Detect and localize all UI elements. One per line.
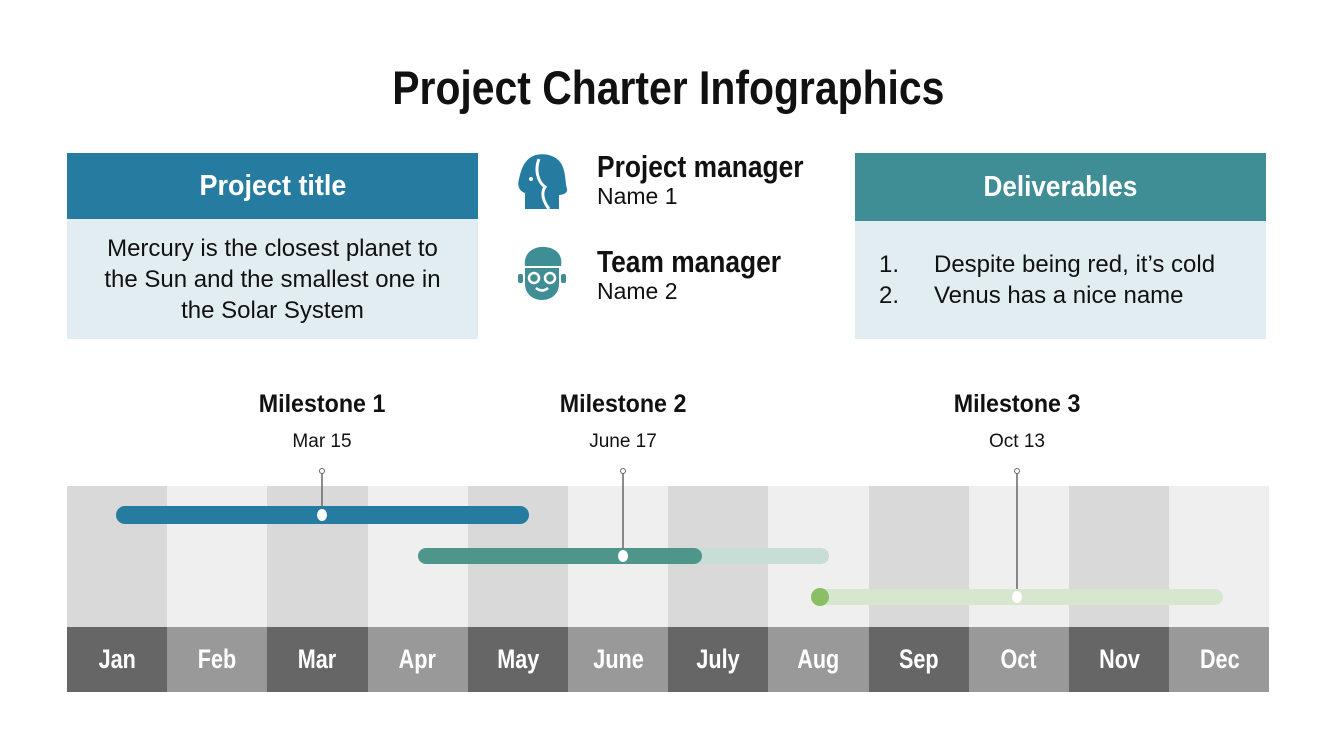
list: deliverables: Venus has a nice name bbox=[934, 282, 1184, 309]
heading: project title: Project title bbox=[199, 170, 346, 202]
gantt chart: Mar bbox=[298, 644, 337, 674]
list: deliverables: Despite being red, it’s cold bbox=[934, 251, 1215, 278]
gantt chart: Dec bbox=[1199, 644, 1239, 674]
list: deliverables: 1. bbox=[879, 251, 899, 278]
gantt chart: Feb bbox=[198, 644, 236, 674]
text: project description: the Sun and the smallest one in bbox=[104, 266, 441, 292]
gantt chart: Sep bbox=[899, 644, 938, 674]
milestone 2 label: June 17 bbox=[589, 431, 657, 452]
gantt chart: July bbox=[697, 644, 740, 674]
text: project manager: Project manager bbox=[597, 149, 803, 184]
gantt chart: June bbox=[593, 644, 643, 674]
milestone 1 label: Milestone 1 bbox=[259, 390, 385, 418]
milestone 2 label bbox=[560, 390, 686, 452]
list: deliverables: 2. bbox=[879, 282, 899, 309]
panel: project title bbox=[67, 153, 478, 339]
gantt chart: May bbox=[497, 644, 539, 674]
text: project description: the Solar System bbox=[181, 296, 364, 324]
milestone 2 label: Milestone 2 bbox=[560, 390, 686, 418]
gantt chart: Aug bbox=[797, 644, 839, 674]
icon: project manager bbox=[518, 154, 568, 209]
milestone 3 label bbox=[954, 390, 1080, 452]
text: team manager: Team manager bbox=[597, 244, 781, 279]
milestone 1 label bbox=[259, 390, 385, 452]
icon: team manager bbox=[518, 246, 566, 300]
gantt chart: Nov bbox=[1099, 644, 1139, 674]
milestone 3 label: Milestone 3 bbox=[954, 390, 1080, 418]
heading: project title bbox=[67, 153, 478, 219]
panel: deliverables bbox=[855, 153, 1266, 339]
text: team manager: Name 2 bbox=[597, 278, 678, 304]
list: deliverables bbox=[855, 221, 1266, 339]
panel: managers bbox=[518, 149, 804, 304]
heading: deliverables: Deliverables bbox=[984, 170, 1137, 202]
heading: deliverables bbox=[855, 153, 1266, 221]
gantt chart: Jan bbox=[98, 644, 136, 674]
text: project manager bbox=[597, 149, 804, 209]
text: team manager bbox=[597, 244, 781, 304]
text: project description: Mercury is the closest planet to bbox=[107, 234, 438, 262]
gantt chart: Apr bbox=[399, 644, 436, 674]
title: Project Charter Infographics bbox=[392, 61, 944, 114]
milestone 3 label: Oct 13 bbox=[989, 431, 1045, 452]
text: project description bbox=[67, 219, 478, 339]
milestone 1 label: Mar 15 bbox=[292, 431, 352, 452]
gantt chart: Oct bbox=[1001, 644, 1037, 674]
text: project manager: Name 1 bbox=[597, 183, 678, 209]
